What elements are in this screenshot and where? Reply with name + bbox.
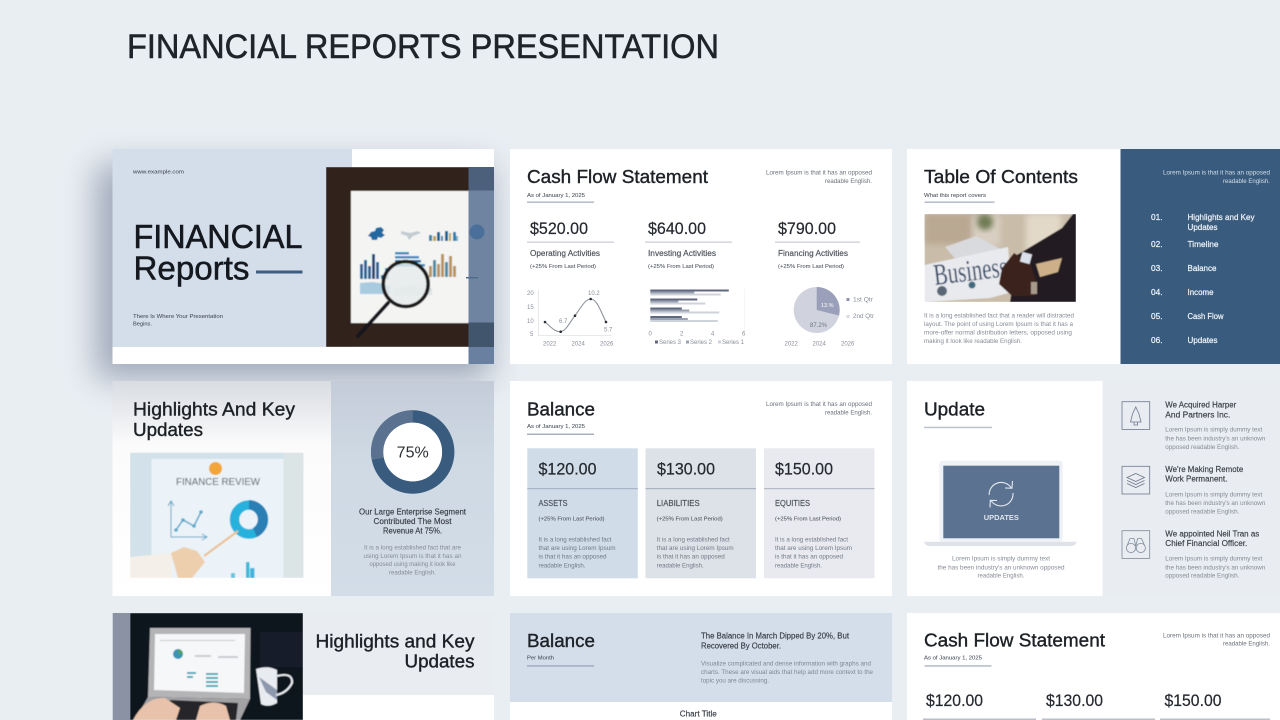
amounts row: $130.00 [1046, 691, 1103, 710]
callout heading: Our Large Enterprise Segment [359, 508, 467, 516]
intro note: readable English. [825, 410, 872, 416]
right panel [331, 381, 494, 596]
metric: investing: $640.00 [648, 219, 706, 238]
intro note: readable English. [825, 179, 872, 185]
laptop caption: the has been industry's an unknown opposed [938, 564, 1065, 571]
photo bars mid right [429, 254, 456, 277]
intro note [1163, 633, 1270, 648]
update item one: We Acquired Harper [1165, 401, 1237, 410]
icon: tree [1122, 402, 1150, 429]
update item three: Lorem Ipsum is simply dummy text [1165, 556, 1263, 563]
magnifier lens [383, 262, 428, 306]
slide title: Balance [527, 398, 595, 419]
body paragraph: making it look like readable English. [924, 338, 1022, 345]
slide title: Update [924, 398, 985, 419]
laptop caption [938, 556, 1065, 580]
band chart dot [470, 224, 484, 240]
contents list: 05. [1151, 311, 1163, 321]
metric: investing: Investing Activities [648, 249, 716, 258]
metric: financing: (+25% From Last Period) [778, 264, 844, 270]
card: equities: EQUITIES [775, 499, 810, 508]
slide title: Updates [404, 651, 474, 672]
card: liabilities: It is a long established fact [657, 537, 730, 544]
metric: financing: $790.00 [778, 219, 836, 238]
slide title [316, 631, 475, 672]
intro note: readable English. [1223, 642, 1270, 648]
pie chart: 2024 [812, 342, 827, 348]
callout paragraph [364, 544, 462, 577]
donut chart [371, 410, 454, 494]
intro note: Lorem Ipsum is that it has an opposed [766, 402, 872, 408]
card: equities [764, 448, 874, 578]
callout paragraph: opposed using making it look like [370, 561, 456, 568]
update item three: Chief Financial Officer. [1165, 539, 1247, 548]
card: liabilities: (+25% From Last Period) [657, 517, 723, 523]
magnifier handle [358, 303, 388, 336]
metric: investing: (+25% From Last Period) [648, 264, 714, 270]
update item one: the has been industry's an unknown [1165, 435, 1266, 442]
line chart: 6.7 [559, 319, 568, 325]
slide background [510, 381, 892, 596]
icon: binoculars [1122, 531, 1150, 558]
slide background [907, 613, 1280, 720]
line chart: 10 [527, 319, 534, 325]
subtitle: What this report covers [924, 193, 986, 199]
card: liabilities: readable English. [657, 562, 704, 569]
contents list: Highlights and Key [1188, 212, 1255, 222]
left panel [112, 381, 331, 596]
summary paragraph: Visualize complicated and dense information with graphs and [701, 661, 872, 668]
card: equities: readable English. [775, 562, 822, 569]
cover white base [112, 149, 494, 364]
update item one: opposed readable English. [1165, 444, 1240, 451]
photo bars mid left [360, 254, 388, 279]
blue header band [510, 613, 892, 702]
slide: update [907, 381, 1280, 596]
line chart: 15 [527, 305, 534, 311]
line chart: 2022 [543, 342, 557, 348]
laptop caption: readable English. [978, 573, 1025, 580]
metric: financing: Financing Activities [778, 249, 848, 258]
update item two: We're Making Remote [1165, 465, 1244, 474]
card: assets: is that it has an opposed [538, 554, 607, 561]
slide: cash flow statement second [907, 613, 1280, 720]
slide: balance per month [510, 613, 892, 720]
right grey side [1102, 381, 1280, 596]
body paragraph: It is a long established fact that a reader will distracted [924, 312, 1075, 319]
horizontal bar chart: Series 3 [659, 340, 682, 346]
pie chart: 87.2% [810, 323, 828, 329]
card: equities: is that it has an opposed [775, 554, 844, 561]
cover url: www.example.com [132, 170, 184, 176]
line chart: 5.7 [604, 328, 613, 334]
slide title: Table Of Contents [924, 166, 1078, 187]
subtitle: Per Month [527, 656, 554, 662]
laptop illustration: UPDATES [984, 513, 1019, 522]
slide: cash flow statement [510, 149, 892, 364]
slide title: Cash Flow Statement [527, 166, 708, 187]
callout heading: Revenue At 75%. [383, 527, 442, 536]
card: assets [527, 448, 638, 578]
laptop illustration [924, 461, 1077, 546]
slide title: Highlights And Key [133, 399, 296, 420]
metric: operating: $520.00 [530, 219, 588, 238]
horizontal bar chart: 0 [648, 332, 652, 338]
update item two: Work Permanent. [1165, 475, 1227, 484]
line chart: 2026 [600, 342, 614, 348]
date subtitle: As of January 1, 2025 [527, 424, 585, 430]
photo bars top right [429, 231, 458, 241]
card: liabilities: $130.00 [657, 459, 715, 478]
card: liabilities [646, 448, 756, 578]
white side [907, 381, 1102, 596]
photo map shape [368, 227, 385, 240]
callout heading: Contributed The Most [374, 517, 452, 526]
refresh icon [989, 481, 1013, 508]
callout paragraph: It is a long established fact that are [364, 544, 462, 552]
card: assets: ASSETS [538, 499, 568, 508]
laptop caption: Lorem Ipsum is simply dummy text [952, 556, 1050, 563]
drop shadow behind cover slide [96, 165, 490, 379]
summary heading [701, 631, 850, 650]
intro note: Lorem Ipsum is that it has an opposed [766, 170, 872, 176]
cover tagline [133, 314, 223, 328]
pie chart: 2nd Qtr [853, 314, 874, 320]
body paragraph: layout. The point of using Lorem Ipsum is that it has a [924, 321, 1074, 328]
slide title: Cash Flow Statement [924, 630, 1105, 651]
summary paragraph: charts. These are visual aids that help add more context to the [701, 669, 874, 676]
card: equities: It is a long established fact [775, 537, 848, 544]
photo area chart [360, 282, 390, 294]
photo: business newspaper: Business [932, 250, 1009, 292]
update item three: opposed readable English. [1165, 573, 1240, 580]
cover heading [134, 219, 302, 288]
blue contents panel [1120, 149, 1280, 364]
contents list: 03. [1151, 263, 1163, 273]
amounts row: $150.00 [1164, 691, 1222, 710]
contents list: 04. [1151, 287, 1163, 297]
cover blue panel [112, 149, 352, 347]
white lower area [510, 702, 892, 720]
pie chart [784, 287, 874, 348]
cover photo: report under magnifying glass [326, 167, 494, 347]
pie chart: 13.% [821, 303, 834, 309]
cover band bottom [468, 347, 494, 364]
contents list: 02. [1151, 239, 1163, 249]
metric: investing [645, 219, 732, 270]
callout paragraph: using Lorem Ipsum is that it has an [364, 553, 462, 560]
card: liabilities: LIABILITIES [657, 499, 700, 508]
translucent band segments [468, 167, 494, 190]
contents list: Income [1188, 287, 1214, 297]
horizontal bar chart [648, 289, 746, 346]
slide title: Balance [527, 630, 595, 651]
photo horizontal bars [395, 252, 425, 266]
metric: operating: (+25% From Last Period) [530, 264, 596, 270]
update item three: the has been industry's an unknown [1165, 564, 1266, 571]
contents list: Balance [1188, 263, 1217, 273]
card: equities: $150.00 [775, 459, 833, 478]
card: assets: that are using Lorem Ipsum [538, 545, 616, 552]
card: assets: readable English. [538, 562, 586, 569]
slide title [133, 399, 296, 440]
slide: balance cards [510, 381, 892, 596]
date subtitle: As of January 1, 2025 [924, 656, 982, 662]
cover accent line [256, 270, 302, 274]
contents list: Updates [1188, 222, 1218, 232]
grey side [303, 613, 494, 720]
line chart: 5 [530, 332, 534, 338]
update item two: Lorem Ipsum is simply dummy text [1165, 491, 1263, 498]
horizontal bar chart: 6 [742, 332, 746, 338]
card: assets: (+25% From Last Period) [538, 517, 605, 523]
horizontal bar chart: Series 1 [722, 340, 745, 346]
metric: financing [775, 219, 860, 270]
card: assets: It is a long established fact [538, 537, 612, 544]
horizontal bar chart: Series 2 [690, 340, 713, 346]
intro note [766, 402, 872, 416]
summary paragraph: topic you are discussing. [701, 678, 769, 685]
metric: operating: Operating Activities [530, 249, 600, 258]
update item three: We appointed Neil Tran as [1165, 529, 1259, 538]
summary heading: Recovered By October. [701, 641, 781, 650]
donut chart: 75% [397, 444, 429, 462]
cover tagline: Begins. [133, 322, 152, 328]
card: equities: that are using Lorem Ipsum [775, 545, 852, 552]
chart title: Chart Title [680, 709, 717, 718]
contents list: Timeline [1188, 239, 1219, 249]
line chart: 10.2 [588, 291, 600, 297]
cover heading: Reports [134, 250, 250, 288]
horizontal bar chart: 2 [680, 332, 684, 338]
contents list: 01. [1151, 212, 1163, 222]
icon: layers [1122, 466, 1150, 494]
update item one [1165, 401, 1266, 451]
slide background [510, 149, 892, 364]
callout heading [359, 508, 467, 536]
pie chart: 1st Qtr [853, 298, 873, 304]
panel note: Lorem Ipsum is that it has an opposed [1163, 170, 1270, 176]
card: equities: (+25% From Last Period) [775, 517, 841, 523]
body paragraph [924, 312, 1075, 345]
white lower block [303, 695, 494, 720]
line chart [527, 290, 614, 348]
update item three [1165, 529, 1266, 580]
contents list [1151, 212, 1255, 345]
summary paragraph [701, 661, 874, 685]
summary heading: The Balance In March Dipped By 20%, But [701, 631, 850, 640]
amounts row [923, 691, 1270, 720]
amounts row: $120.00 [926, 691, 983, 710]
slide: highlights with laptop photo [113, 613, 494, 720]
photo: laptop on desk [130, 613, 303, 720]
update item two [1165, 465, 1266, 515]
card: liabilities: is that it has an opposed [657, 554, 725, 561]
contents list: 06. [1151, 335, 1163, 345]
update item two: opposed readable English. [1165, 508, 1240, 515]
photo: business newspaper [924, 214, 1076, 302]
slide title: Highlights and Key [316, 631, 475, 652]
slide: table of contents [907, 149, 1280, 364]
line chart: 2024 [572, 342, 586, 348]
contents list: Cash Flow [1188, 311, 1224, 321]
pie chart: 2026 [841, 342, 855, 348]
metric: operating [527, 219, 614, 270]
panel note [1163, 170, 1270, 185]
cover heading: FINANCIAL [134, 219, 302, 256]
update item two: the has been industry's an unknown [1165, 500, 1266, 507]
slide: cover [112, 149, 494, 364]
slide: highlights and key updates [112, 381, 494, 596]
line chart: 20 [527, 291, 534, 297]
date subtitle: As of January 1, 2025 [527, 193, 585, 199]
panel note: readable English. [1223, 179, 1270, 185]
update item one: Lorem Ipsum is simply dummy text [1165, 427, 1263, 434]
slide title: Updates [133, 419, 203, 440]
page title: FINANCIAL REPORTS PRESENTATION [127, 28, 719, 66]
card: liabilities: that are using Lorem Ipsum [657, 545, 734, 552]
photo: finance review: FINANCE REVIEW [176, 476, 260, 488]
update item one: And Partners Inc. [1165, 410, 1230, 419]
cover tagline: There Is Where Your Presentation [133, 314, 223, 320]
contents list: Updates [1188, 335, 1218, 345]
photo: finance review [130, 452, 304, 578]
white side [907, 149, 1120, 364]
photo side band [113, 613, 130, 720]
body paragraph: more-offer normal distribution letters, opposed using [924, 329, 1073, 336]
intro note [766, 170, 872, 185]
callout paragraph: readable English. [389, 570, 436, 577]
pie chart: 2022 [784, 342, 799, 348]
intro note: Lorem Ipsum is that it has an opposed [1163, 633, 1270, 639]
horizontal bar chart: 4 [711, 332, 715, 338]
card: assets: $120.00 [538, 459, 596, 478]
